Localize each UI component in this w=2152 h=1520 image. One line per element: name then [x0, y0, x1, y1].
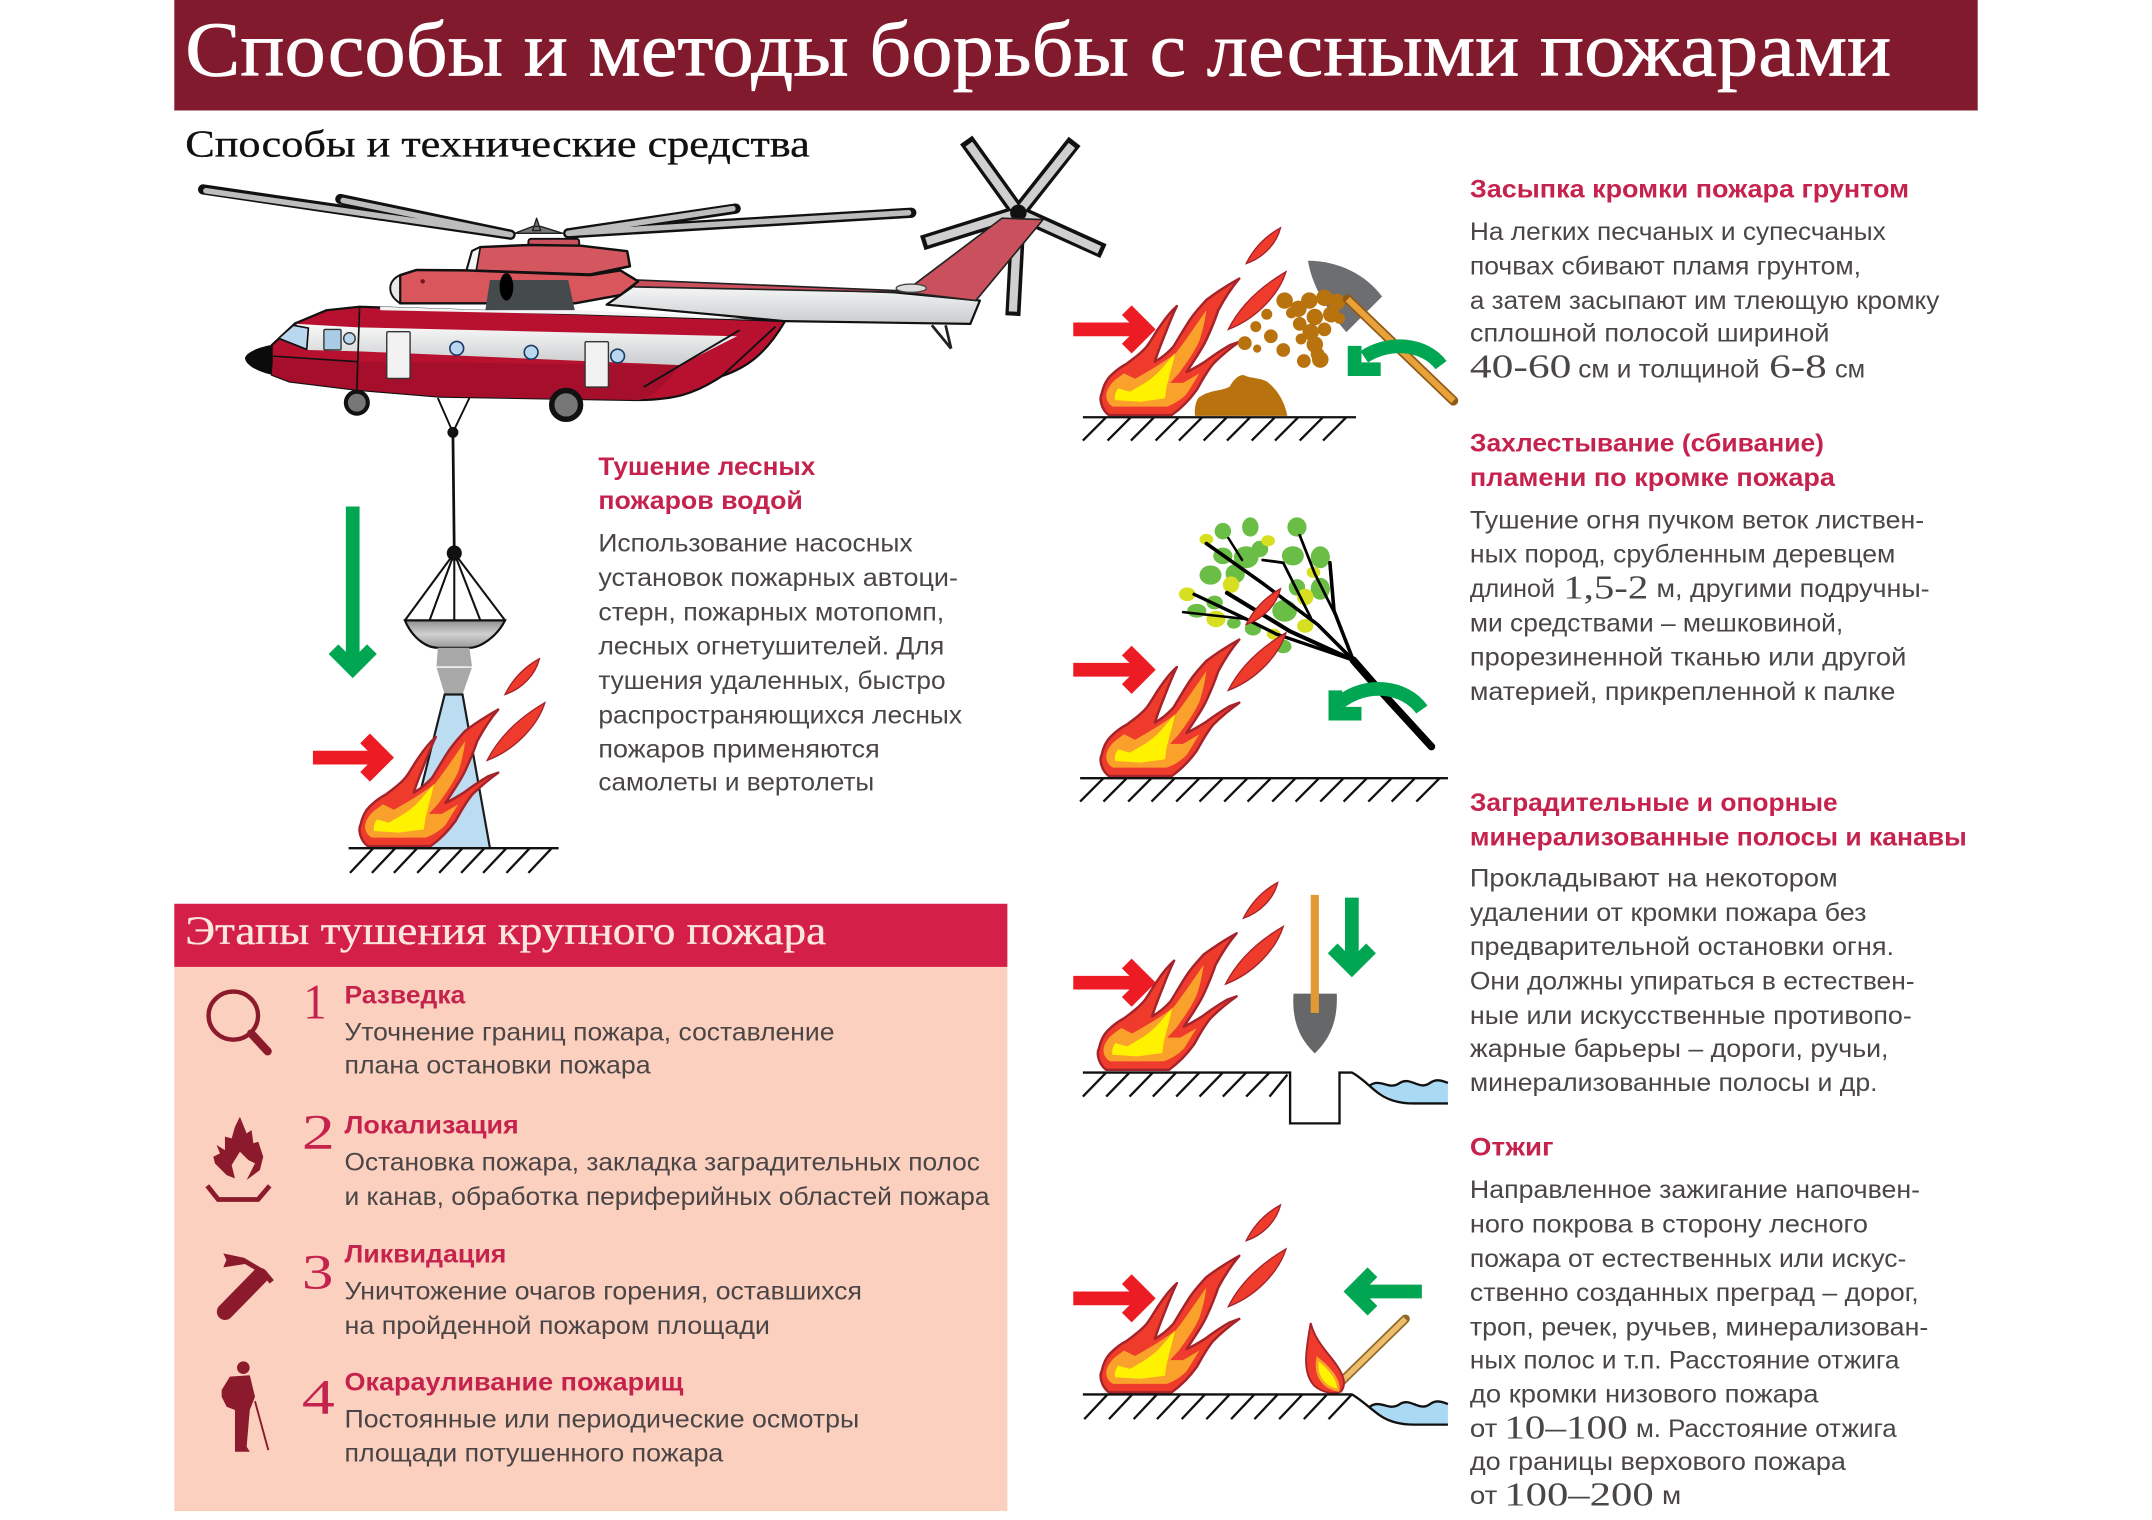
- illustration: backfire: [1073, 1205, 1448, 1425]
- text: covering with soil: 40-60: [1470, 347, 1571, 385]
- text: water extinguishing: лесных огнетушителей. Для: [598, 634, 944, 661]
- helicopter illustration: [203, 140, 1103, 419]
- text: beating flames: ми средствами – мешковиной,: [1470, 610, 1843, 637]
- text: backfire: ственно созданных преград – дорог,: [1470, 1280, 1919, 1307]
- text: water extinguishing: стерн, пожарных мотопомп,: [598, 599, 944, 626]
- stage 4 text: Окарауливание пожарищ: [344, 1369, 684, 1396]
- text: covering with soil: см и толщиной: [1578, 356, 1759, 383]
- text: backfire: до кромки низового пожара: [1470, 1382, 1819, 1409]
- text: covering with soil: 6-8: [1769, 347, 1827, 385]
- heading: water extinguishing: пожаров водой: [598, 488, 803, 515]
- text: beating flames: м, другими подручны-: [1657, 576, 1930, 603]
- text: covering with soil: см: [1835, 356, 1865, 383]
- soil pile: [1195, 375, 1287, 416]
- stage 2 text: и канав, обработка периферийных областей пожара: [344, 1184, 990, 1211]
- text: beating flames: прорезиненной тканью или другой: [1470, 645, 1906, 672]
- text: backfire: до границы верхового пожара: [1470, 1449, 1846, 1476]
- flame: water method: [360, 659, 545, 846]
- green curved arrow: [1335, 689, 1422, 714]
- text: mineralized strips: [1470, 866, 1915, 1097]
- green arrow: [1353, 1272, 1422, 1311]
- text: backfire: 100–200: [1504, 1476, 1654, 1514]
- text: backfire: м: [1662, 1483, 1681, 1510]
- red arrow: [1073, 310, 1146, 349]
- soil clods: [1238, 290, 1345, 368]
- text: mineralized strips: жарные барьеры – дороги, ручьи,: [1470, 1036, 1888, 1063]
- heading: beating flames: [1470, 431, 1835, 492]
- stage 4 text: площади потушенного пожара: [344, 1441, 724, 1468]
- text: covering with soil: почвах сбивают пламя грунтом,: [1470, 253, 1861, 280]
- stage 1 text: Уточнение границ пожара, составление: [344, 1019, 834, 1046]
- text: beating flames: материей, прикрепленной к палке: [1470, 679, 1895, 706]
- ground with ditch: [1083, 1073, 1448, 1123]
- heading: mineralized strips: [1470, 790, 1967, 851]
- stage 3 text: на пройденной пожаром площади: [344, 1313, 770, 1340]
- panel: stages of extinguishing a large fire: [174, 904, 1007, 1511]
- text: mineralized strips: ные или искусственные противопо-: [1470, 1003, 1912, 1030]
- water: [1370, 1401, 1448, 1425]
- stage 3 number: 3: [302, 1245, 334, 1300]
- text: mineralized strips: минерализованные полосы и др.: [1470, 1070, 1878, 1097]
- shovel handle: [1348, 299, 1453, 401]
- text: mineralized strips: предварительной остановки огня.: [1470, 934, 1894, 961]
- stage 2 number: 2: [302, 1105, 335, 1160]
- shovel: [1293, 895, 1337, 1053]
- stage 2 text: Локализация: [344, 1113, 519, 1140]
- flame: [1101, 228, 1286, 415]
- text: backfire: пожара от естественных или искус-: [1470, 1246, 1906, 1273]
- green arrow: bucket descent: [334, 506, 372, 668]
- ground: water method: [349, 848, 559, 873]
- text: mineralized strips: Прокладывают на некотором: [1470, 866, 1838, 893]
- stage 2 text: [344, 1113, 990, 1211]
- text: water extinguishing: тушения удаленных, быстро: [598, 668, 946, 695]
- heading: mineralized strips: минерализованные полосы и канавы: [1470, 824, 1967, 851]
- text: covering with soil: На легких песчаных и супесчаных: [1470, 219, 1886, 246]
- text: backfire: 10–100: [1504, 1408, 1628, 1446]
- text: covering with soil: а затем засыпают им тлеющую кромку: [1470, 288, 1940, 315]
- match: [1306, 1319, 1405, 1393]
- text: mineralized strips: удалении от кромки пожара без: [1470, 900, 1867, 927]
- text: backfire: ных полос и т.п. Расстояние отжига: [1470, 1347, 1900, 1374]
- red arrow: [1073, 963, 1146, 1002]
- title band: Способы и методы борьбы с лесными пожарами: [185, 5, 1891, 92]
- icon: fire extinguisher: [223, 1253, 272, 1312]
- shovel handle highlight: [1348, 299, 1453, 401]
- illustration: beating flames with branches: [1073, 517, 1448, 802]
- heading: water extinguishing: Тушение лесных: [598, 454, 816, 481]
- stage 1 text: плана остановки пожара: [344, 1052, 651, 1079]
- text: beating flames: ных пород, срубленным деревцем: [1470, 542, 1895, 569]
- flame: [1098, 882, 1283, 1070]
- water: [1370, 1080, 1448, 1103]
- water bucket on sling: [405, 398, 505, 694]
- red arrow: wind: [313, 738, 384, 777]
- red arrow: [1073, 651, 1146, 689]
- ground: [1083, 1394, 1448, 1425]
- stage 3 text: Уничтожение очагов горения, оставшихся: [344, 1279, 862, 1306]
- subtitle: methods and equipment: Способы и технические средства: [185, 123, 810, 165]
- text: water extinguishing: Использование насосных: [598, 531, 913, 558]
- flame: [1101, 1205, 1286, 1392]
- leaves: [1179, 517, 1330, 653]
- stage 3 text: [344, 1242, 862, 1340]
- heading: beating flames: пламени по кромке пожара: [1470, 465, 1835, 492]
- branch: [1183, 535, 1431, 747]
- heading: covering with soil: Засыпка кромки пожара грунтом: [1470, 177, 1909, 204]
- icon: flame over tray: [207, 1117, 270, 1200]
- text: water extinguishing: установок пожарных автоци-: [598, 565, 958, 592]
- ground: [1080, 778, 1448, 802]
- heading: backfire: Отжиг: [1470, 1135, 1554, 1162]
- panel header: [174, 904, 1007, 967]
- stage 4 text: [344, 1369, 859, 1468]
- heading: water extinguishing: [598, 454, 816, 515]
- icon: magnifier: [209, 992, 268, 1051]
- water jet: [406, 694, 490, 848]
- red arrow: [1073, 1279, 1146, 1318]
- text: water extinguishing: самолеты и вертолеты: [598, 770, 874, 797]
- text: water extinguishing: [598, 531, 963, 797]
- icon: patrolling person: [222, 1361, 268, 1452]
- panel header: Этапы тушения крупного пожара: [185, 909, 827, 953]
- illustration: covering fire edge with soil: [1073, 228, 1453, 441]
- text: covering with soil: [1470, 219, 1940, 385]
- heading: beating flames: Захлестывание (сбивание): [1470, 431, 1824, 458]
- text: water extinguishing: распространяющихся лесных: [598, 702, 963, 729]
- stage 4 number: 4: [302, 1370, 335, 1425]
- text: backfire: от: [1470, 1483, 1497, 1510]
- text: backfire: [1470, 1177, 1928, 1514]
- stage 3 text: Ликвидация: [344, 1242, 506, 1269]
- stage 1 text: [344, 982, 834, 1079]
- text: water extinguishing: пожаров применяются: [598, 737, 880, 764]
- shovel blade: [1308, 261, 1382, 332]
- text: backfire: м. Расстояние отжига: [1636, 1416, 1897, 1443]
- green arrow: [1333, 898, 1371, 968]
- text: beating flames: длиной: [1470, 576, 1555, 603]
- text: mineralized strips: Они должны упираться в естествен-: [1470, 969, 1915, 996]
- text: covering with soil: сплошной полосой шириной: [1470, 321, 1829, 348]
- green curved arrow: [1355, 346, 1441, 369]
- text: backfire: ного покрова в сторону лесного: [1470, 1211, 1868, 1238]
- text: beating flames: [1470, 507, 1930, 706]
- text: beating flames: Тушение огня пучком веток листвен-: [1470, 507, 1924, 534]
- flame: [1101, 589, 1286, 776]
- stage 2 text: Остановка пожара, закладка заградительных полос: [344, 1150, 980, 1177]
- stage 1 text: Разведка: [344, 982, 466, 1009]
- illustration: mineralized strips and ditches: [1073, 882, 1448, 1123]
- stage 1 number: 1: [303, 974, 327, 1029]
- text: backfire: троп, речек, ручьев, минерализован-: [1470, 1314, 1928, 1341]
- stage 4 text: Постоянные или периодические осмотры: [344, 1406, 859, 1433]
- text: backfire: Направленное зажигание напочвен-: [1470, 1177, 1920, 1204]
- heading: mineralized strips: Заградительные и опорные: [1470, 790, 1838, 817]
- text: beating flames: 1,5-2: [1563, 568, 1648, 606]
- text: backfire: от: [1470, 1416, 1497, 1443]
- ground: [1083, 417, 1356, 441]
